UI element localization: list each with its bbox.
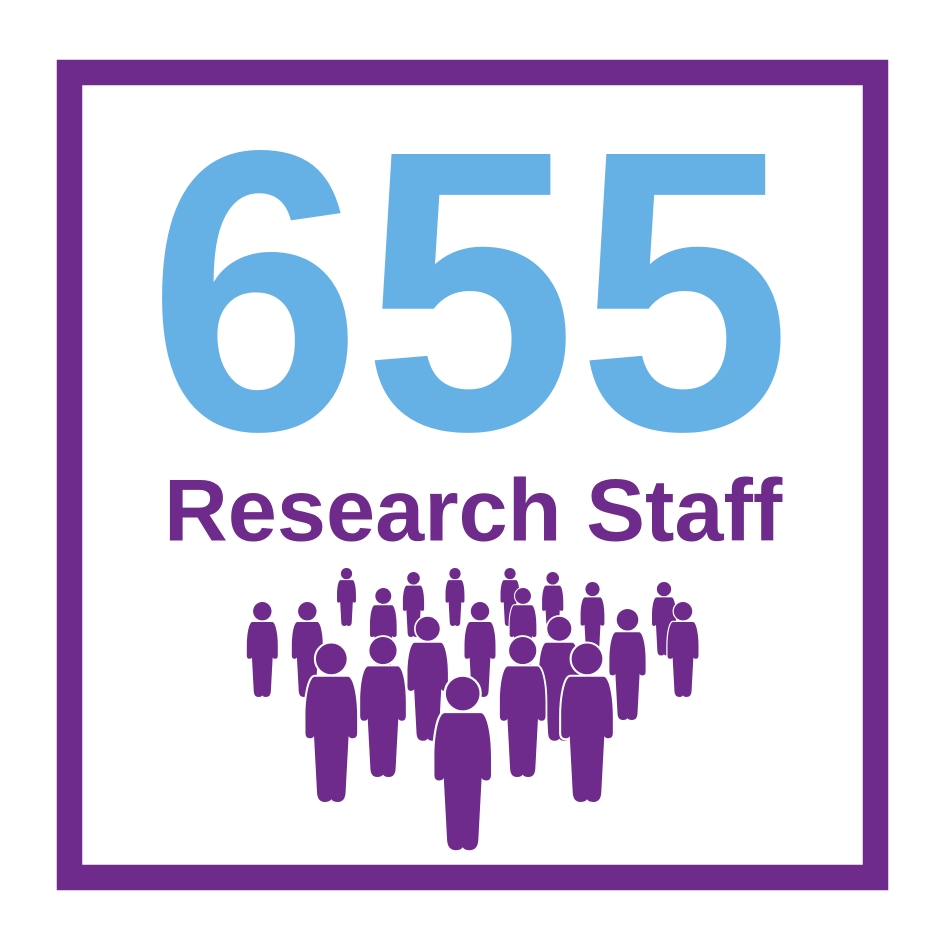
big number 655: 655 [148, 68, 792, 515]
purple square frame [70, 72, 876, 878]
heading: Research Staff: Research Staff [164, 460, 783, 560]
icon: crowd of people [247, 568, 698, 850]
